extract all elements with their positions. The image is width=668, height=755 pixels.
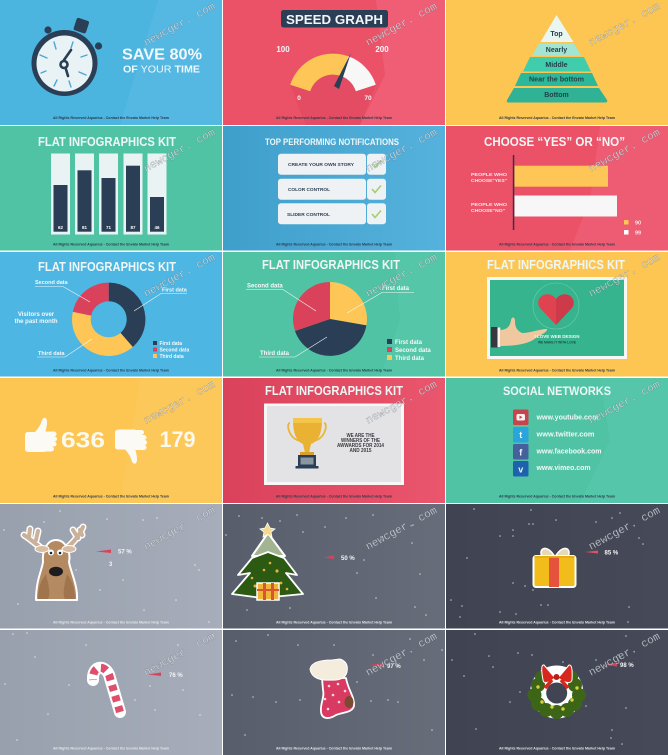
label: no: CHOOSE"NO" (471, 208, 505, 214)
social: twitter (513, 427, 594, 442)
watermarks: newcger. com (364, 505, 440, 554)
icon: thumb down (115, 430, 147, 464)
value: 98 % (620, 663, 634, 669)
watermarks: newcger. com (142, 1, 218, 50)
legend (387, 339, 431, 362)
gauge labels (276, 45, 389, 102)
value: 50 % (341, 556, 355, 562)
pyramid chart: Nearly (546, 47, 567, 54)
callout: third data: Third data (38, 351, 66, 357)
panel: trophy (223, 378, 445, 503)
watermarks: newcger. com (587, 379, 663, 428)
social: youtube: www.youtube.com (535, 414, 598, 422)
footer text: All Rights Reserved Aquarius - Contact the Envato Market Help Team (499, 746, 615, 750)
heading: FLAT INFOGRAPHICS KIT (265, 383, 403, 398)
footer text: All Rights Reserved Aquarius - Contact the Envato Market Help Team (53, 368, 169, 372)
footer text: All Rights Reserved Aquarius - Contact the Envato Market Help Team (276, 242, 392, 246)
value: 97 % (387, 664, 401, 670)
legend: Third data (395, 356, 425, 362)
gauge labels: 0 (297, 95, 301, 102)
gauge chart (290, 53, 376, 91)
icon: thumb up (25, 418, 57, 452)
number: dislikes: 179 (160, 427, 196, 452)
icon: stocking (310, 659, 354, 718)
panel: wreath (446, 630, 668, 755)
panel: likes (0, 378, 222, 503)
bar chart: 87 (130, 225, 136, 230)
legend: 90 (635, 220, 641, 226)
footer text: All Rights Reserved Aquarius - Contact the Envato Market Help Team (499, 620, 615, 624)
social: vimeo (513, 461, 590, 476)
social: vimeo: v (518, 464, 523, 474)
social: facebook: www.facebook.com (536, 448, 602, 456)
legend (624, 220, 641, 236)
footer text: All Rights Reserved Aquarius - Contact the Envato Market Help Team (276, 115, 392, 120)
notification row 1: CREATE YOUR OWN STORY (288, 162, 355, 168)
callout: first data (134, 288, 188, 311)
callout: third data (37, 339, 92, 357)
legend: Second data (395, 348, 431, 354)
legend: Second data (160, 348, 189, 354)
panel: social networks (446, 378, 668, 503)
notification row 3 (278, 203, 386, 224)
watermarks (142, 1, 663, 680)
watermarks: newcger. com (364, 127, 440, 176)
heading: FLAT INFOGRAPHICS KIT (487, 257, 625, 272)
pyramid chart: Near the bottom (529, 76, 584, 84)
value: 76 % (169, 673, 183, 679)
watermarks: newcger. com (142, 252, 218, 301)
card (264, 404, 404, 485)
footer text: All Rights Reserved Aquarius - Contact the Envato Market Help Team (276, 494, 392, 498)
marker arrow (96, 550, 111, 553)
footer text: All Rights Reserved Aquarius - Contact the Envato Market Help Team (499, 115, 615, 120)
text: made with love: WE MAKE IT WITH LOVE (538, 340, 576, 344)
bar chart: 46 (154, 225, 160, 230)
heading: SOCIAL NETWORKS (503, 386, 611, 398)
callout: second data: Second data (35, 280, 69, 286)
watermarks: newcger. com (364, 631, 440, 680)
icon: heart (538, 294, 574, 325)
panel: yes or no (446, 126, 668, 250)
panel: notifications (223, 126, 445, 250)
marker arrow (369, 663, 384, 667)
text: visitors: the past month (14, 319, 58, 325)
legend: First data (395, 340, 423, 346)
footer text: All Rights Reserved Aquarius - Contact the Envato Market Help Team (53, 115, 169, 120)
panel: stocking (223, 630, 445, 755)
text: visitors: Visitors over (18, 312, 54, 318)
bar chart (51, 154, 166, 234)
panel: speed graph (223, 0, 445, 125)
text: love web design: I LOVE WEB DESIGN (534, 334, 580, 339)
text: winners: WINNERS OF THE (341, 438, 380, 444)
text: winners: WE ARE THE (346, 433, 375, 439)
footer text: All Rights Reserved Aquarius - Contact the Envato Market Help Team (499, 494, 615, 498)
watermarks: newcger. com (587, 127, 663, 176)
icon: gift box (534, 548, 576, 587)
stray digit: 3 (109, 562, 113, 568)
pie chart (293, 282, 367, 356)
card (487, 277, 627, 359)
callout: third data (259, 337, 327, 357)
legend (153, 341, 189, 360)
watermarks: newcger. com (587, 1, 663, 50)
bar chart: 71 (106, 225, 111, 230)
watermarks: newcger. com (364, 252, 440, 301)
marker arrow (148, 672, 161, 676)
notification row 3: SLIDER CONTROL (287, 212, 330, 218)
social: vimeo: www.vimeo.com (536, 465, 590, 472)
panel: save time (0, 0, 222, 125)
value: 57 % (118, 550, 132, 556)
heading: FLAT INFOGRAPHICS KIT (262, 257, 400, 272)
pyramid chart: Middle (545, 62, 568, 69)
social: twitter: www.twitter.com (535, 432, 594, 438)
text: winners: AWWARDS FOR 2014 (337, 443, 384, 449)
marker arrow (605, 662, 617, 666)
gauge labels: 100 (276, 45, 290, 54)
heading: CHOOSE “YES” OR “NO” (484, 134, 625, 149)
footer text: All Rights Reserved Aquarius - Contact the Envato Market Help Team (53, 620, 169, 624)
legend: 99 (635, 230, 641, 236)
panel: reindeer (0, 504, 222, 628)
panel: web design (446, 252, 668, 376)
watermarks: newcger. com (587, 505, 663, 554)
footer text: All Rights Reserved Aquarius - Contact the Envato Market Help Team (499, 368, 615, 372)
watermarks: newcger. com (142, 127, 218, 176)
heading badge: SPEED GRAPH (286, 12, 383, 27)
watermarks: newcger. com (587, 252, 663, 301)
social: twitter: t (519, 430, 522, 440)
donut chart (72, 283, 145, 356)
bar chart: 62 (58, 225, 63, 230)
bar chart: 81 (82, 225, 87, 230)
heading: FLAT INFOGRAPHICS KIT (38, 259, 176, 274)
pyramid chart: Bottom (544, 92, 569, 99)
panel: tree (223, 504, 445, 628)
social: facebook (513, 444, 602, 460)
heading: TOP PERFORMING NOTIFICATIONS (265, 137, 399, 147)
notification row 2 (278, 179, 386, 200)
legend: Third data (160, 354, 184, 360)
horizontal bar chart (513, 155, 617, 230)
icon: candy cane (93, 668, 120, 712)
watermarks: newcger. com (142, 631, 218, 680)
watermarks: newcger. com (142, 379, 218, 428)
watermarks: newcger. com (364, 1, 440, 50)
callout: third data: Third data (260, 351, 290, 357)
heading: save 80%: SAVE 80% (122, 46, 202, 64)
footer text: All Rights Reserved Aquarius - Contact the Envato Market Help Team (276, 620, 392, 624)
legend: First data (160, 341, 182, 347)
callout: first data: First data (162, 288, 188, 294)
icon: hand (491, 317, 547, 348)
value: 85 % (604, 550, 619, 556)
panel: donut chart (0, 252, 222, 376)
label: yes: PEOPLE WHO (471, 172, 507, 178)
label: yes: CHOOSE"YES" (471, 178, 507, 184)
social: youtube (513, 410, 598, 425)
panel: bar chart (0, 126, 222, 250)
callout: second data (246, 284, 316, 311)
icon: wreath (528, 665, 586, 719)
marker arrow (323, 556, 334, 559)
label: no: PEOPLE WHO (471, 202, 507, 208)
footer text: All Rights Reserved Aquarius - Contact the Envato Market Help Team (276, 746, 392, 750)
callout: first data (347, 286, 414, 313)
pyramid chart: Top (550, 31, 563, 38)
text: winners: AND 2015 (350, 448, 372, 454)
icon: reindeer (24, 527, 83, 600)
pyramid chart (507, 15, 607, 102)
heading: FLAT INFOGRAPHICS KIT (38, 134, 176, 149)
footer text: All Rights Reserved Aquarius - Contact the Envato Market Help Team (53, 746, 169, 750)
gauge labels: 200 (375, 45, 389, 54)
text: of your time: OF YOUR TIME (123, 64, 200, 76)
notification row 2: COLOR CONTROL (288, 187, 330, 193)
watermarks: newcger. com (364, 379, 440, 428)
panel: gift (446, 504, 668, 628)
callout: second data: Second data (247, 284, 283, 290)
callout: first data: First data (382, 286, 410, 292)
panel: pie chart (223, 252, 445, 376)
social: facebook: f (519, 448, 523, 458)
icon: stopwatch (32, 17, 102, 96)
callout: second data (35, 280, 90, 302)
number: likes: 636 (61, 428, 105, 452)
footer text: All Rights Reserved Aquarius - Contact the Envato Market Help Team (53, 242, 169, 246)
notification row 1 (278, 154, 386, 175)
footer text: All Rights Reserved Aquarius - Contact the Envato Market Help Team (53, 494, 169, 498)
gauge labels: 70 (364, 95, 372, 102)
footer text: All Rights Reserved Aquarius - Contact the Envato Market Help Team (276, 368, 392, 372)
panel: candy cane (0, 630, 222, 755)
watermarks: newcger. com (587, 631, 663, 680)
watermarks: newcger. com (142, 505, 218, 554)
footer text: All Rights Reserved Aquarius - Contact the Envato Market Help Team (499, 242, 615, 246)
marker arrow (585, 550, 598, 554)
panel: pyramid (446, 0, 668, 125)
icon: christmas tree (232, 523, 303, 600)
icon: trophy (288, 418, 326, 468)
